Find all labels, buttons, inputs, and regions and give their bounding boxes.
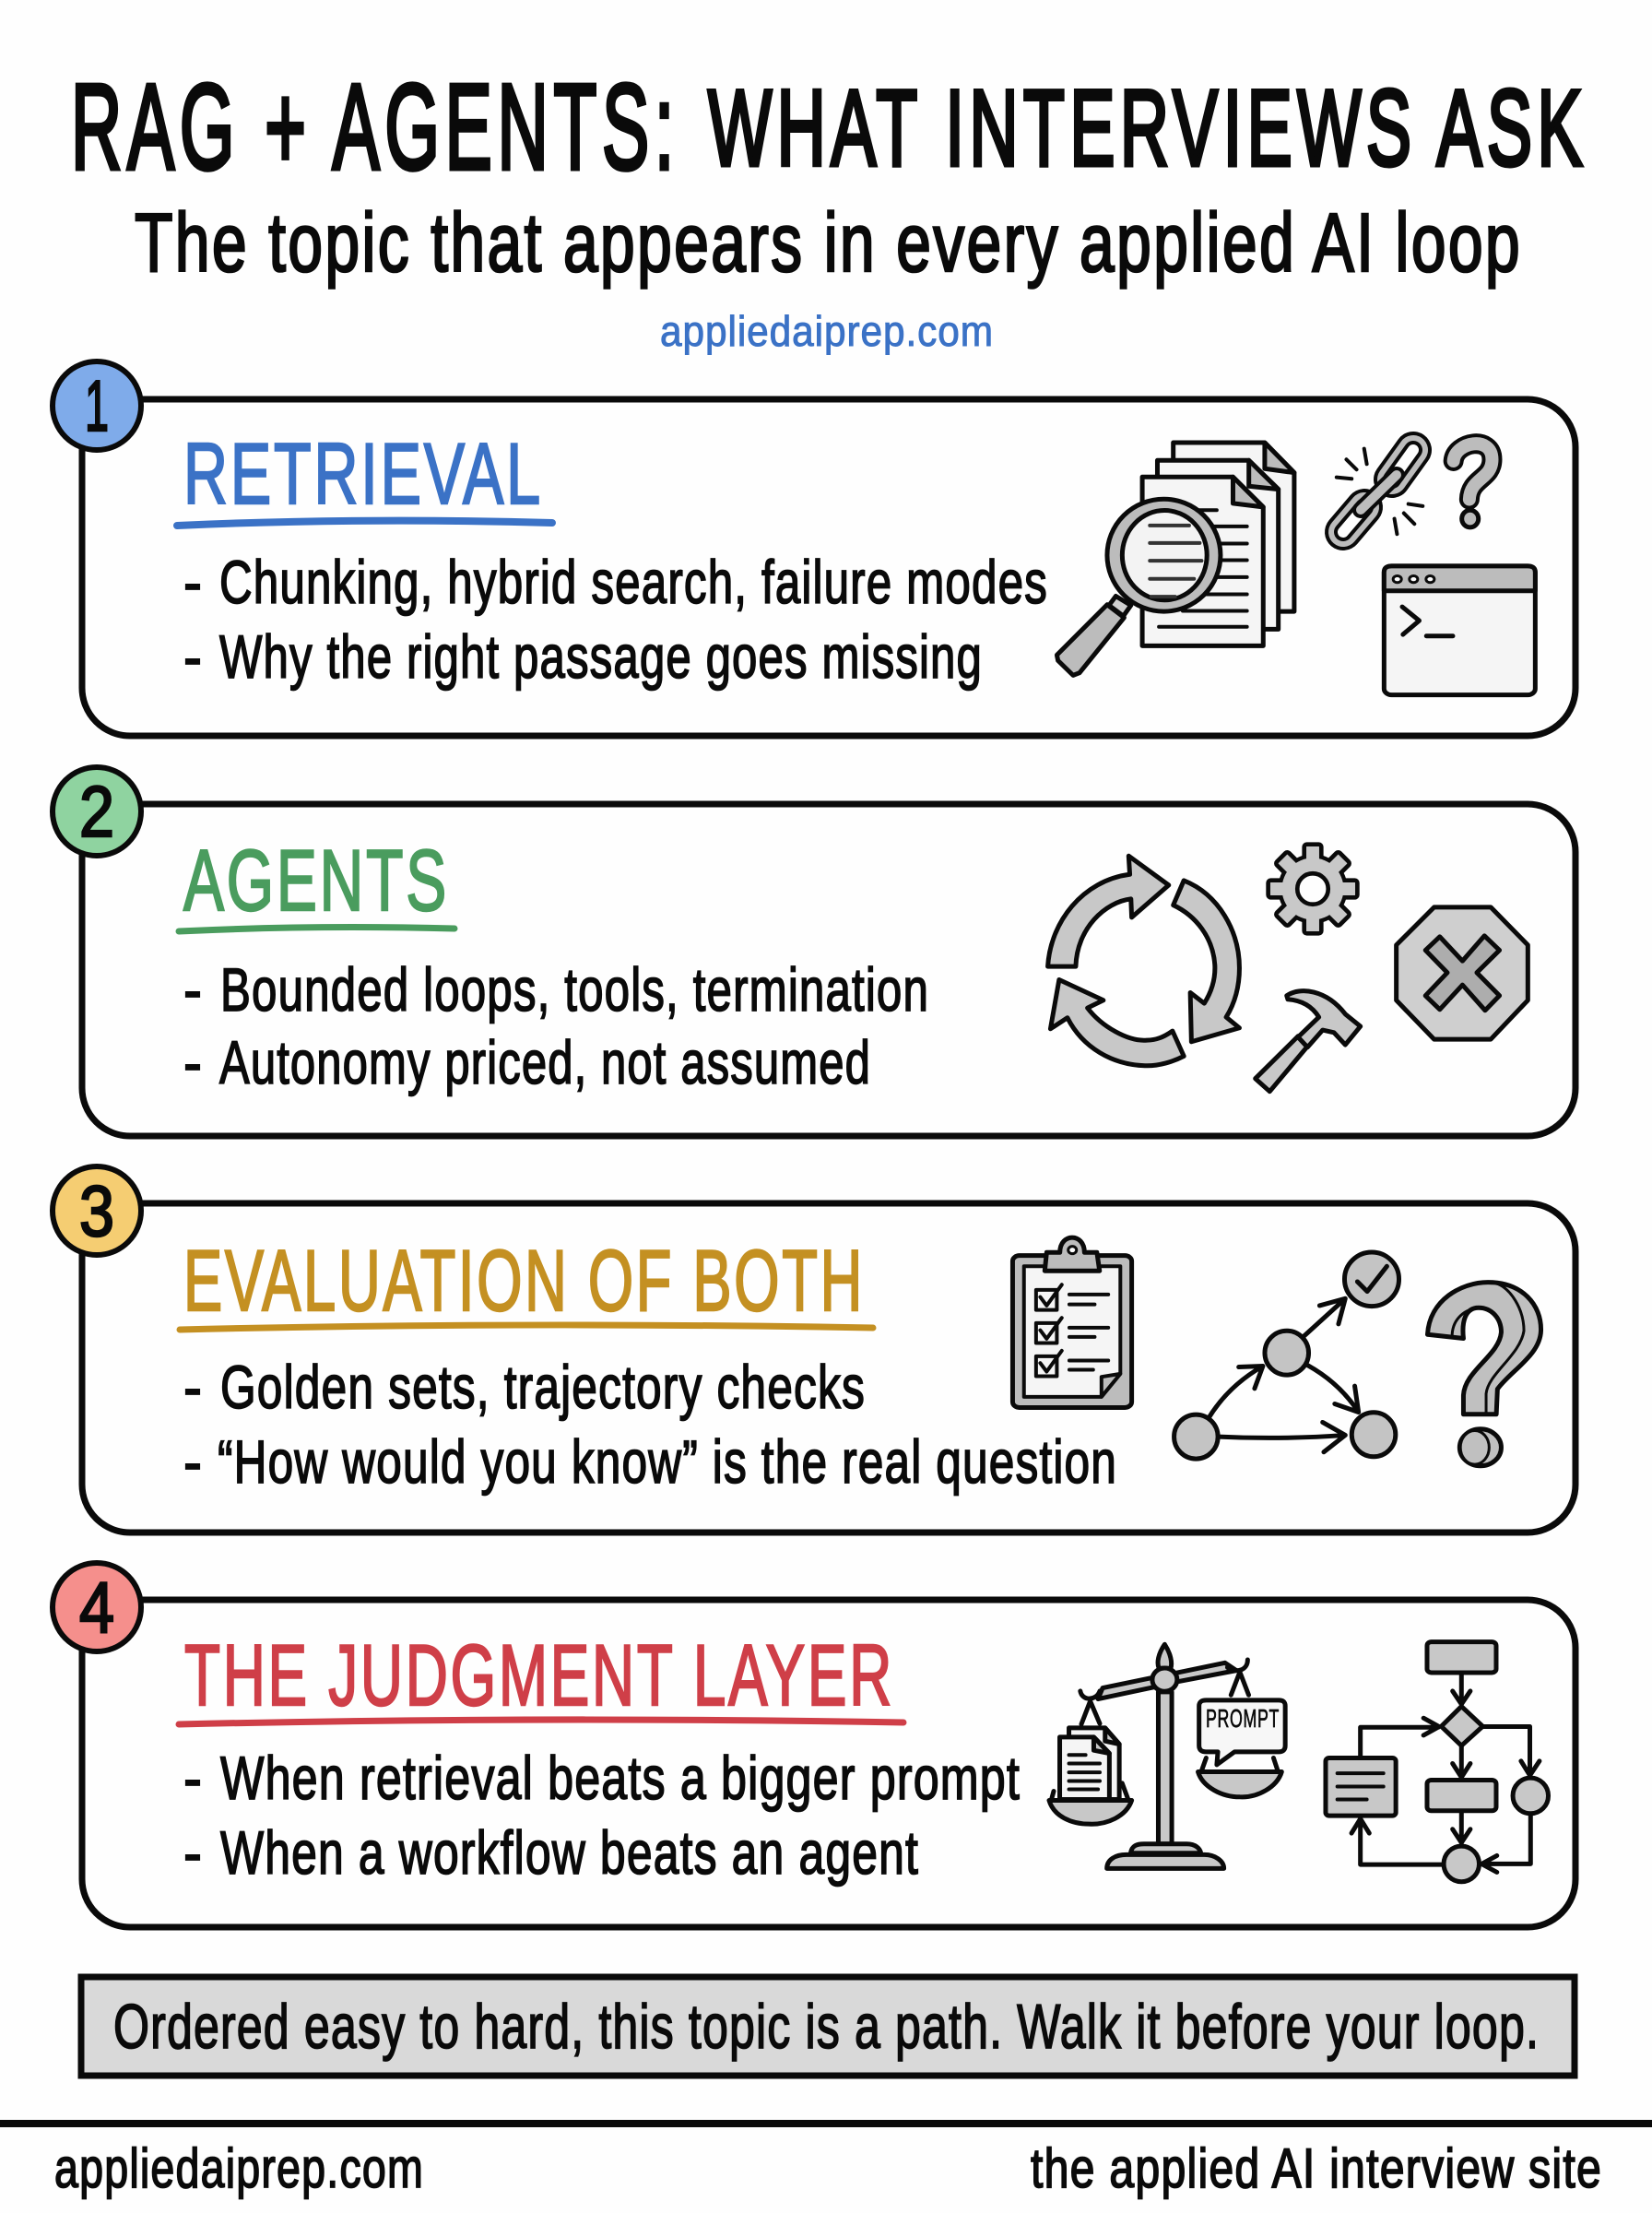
icon: question mark — [1454, 444, 1492, 527]
bullets: evaluation: Golden sets, trajectory checks — [220, 1353, 866, 1421]
title: RAG + AGENTS: — [71, 59, 679, 195]
footer left: site url: appliedaiprep.com — [54, 2137, 424, 2199]
icon: stop sign with x — [1397, 907, 1528, 1039]
heading: retrieval: RETRIEVAL — [183, 425, 543, 522]
bullets: agents: Autonomy priced, not assumed — [219, 1028, 871, 1096]
icon: terminal window — [1384, 566, 1535, 695]
underline: evaluation — [180, 1325, 873, 1330]
number badge 1: 1 — [85, 365, 109, 446]
panel: agents — [53, 767, 1575, 1136]
bullets: judgment: - — [183, 1818, 202, 1887]
underline: judgment — [179, 1720, 903, 1724]
icon: clipboard checklist — [1012, 1237, 1132, 1407]
bullets: judgment — [183, 1744, 1021, 1887]
callout banner — [81, 1977, 1575, 2076]
number badge 2 — [53, 767, 141, 856]
bullets: evaluation: - — [183, 1427, 202, 1496]
icon: loop arrows — [1048, 856, 1239, 1066]
icon: gear — [1268, 845, 1357, 933]
heading: the judgment layer: THE JUDGMENT LAYER — [184, 1627, 894, 1723]
icon: trajectory graph — [1174, 1252, 1399, 1459]
bullets: retrieval: Why the right passage goes missing — [219, 622, 983, 691]
icon: balance scale — [1049, 1644, 1285, 1868]
bullets: judgment: - — [183, 1744, 202, 1812]
number badge 3 — [53, 1166, 141, 1255]
underline: agents — [179, 928, 454, 931]
number badge 1 — [53, 361, 141, 450]
icon: big question mark — [1427, 1283, 1541, 1466]
panel: evaluation of both — [53, 1166, 1575, 1533]
bullets: judgment: When a workflow beats an agent — [220, 1818, 919, 1887]
bullets: retrieval: - — [183, 548, 202, 616]
number badge 4: 4 — [79, 1567, 114, 1648]
number badge 4 — [53, 1563, 141, 1651]
bullets: evaluation: “How would you know” is the real question — [218, 1427, 1117, 1496]
bullets: retrieval: - — [183, 622, 202, 691]
icon: workflow flowchart — [1326, 1642, 1549, 1882]
icon: hammer — [1256, 991, 1361, 1092]
title — [71, 59, 1587, 195]
bullets: evaluation: - — [183, 1353, 202, 1421]
number badge 3: 3 — [79, 1170, 114, 1251]
panel: the judgment layer — [53, 1563, 1575, 1927]
icon: broken chain link — [1337, 449, 1422, 534]
bullets: retrieval — [183, 548, 1048, 691]
bullets: retrieval: Chunking, hybrid search, failure modes — [219, 548, 1048, 616]
bullets: judgment: When retrieval beats a bigger prompt — [220, 1744, 1021, 1812]
heading: agents: AGENTS — [183, 832, 449, 929]
bullets: agents — [183, 955, 929, 1096]
underline: retrieval — [177, 521, 552, 526]
icon: documents and magnifier — [1056, 443, 1294, 675]
bullets: agents: - — [183, 955, 202, 1024]
bullets: agents: - — [183, 1028, 202, 1096]
panel: retrieval — [53, 361, 1575, 736]
heading: evaluation of both: EVALUATION OF BOTH — [183, 1232, 865, 1329]
number badge 2: 2 — [79, 771, 114, 852]
bullets: evaluation — [183, 1353, 1117, 1496]
site url: appliedaiprep.com — [660, 307, 994, 355]
footer rule — [0, 2120, 1652, 2127]
bullets: agents: Bounded loops, tools, termination — [220, 955, 929, 1024]
icon: balance scale: PROMPT — [1206, 1704, 1280, 1733]
